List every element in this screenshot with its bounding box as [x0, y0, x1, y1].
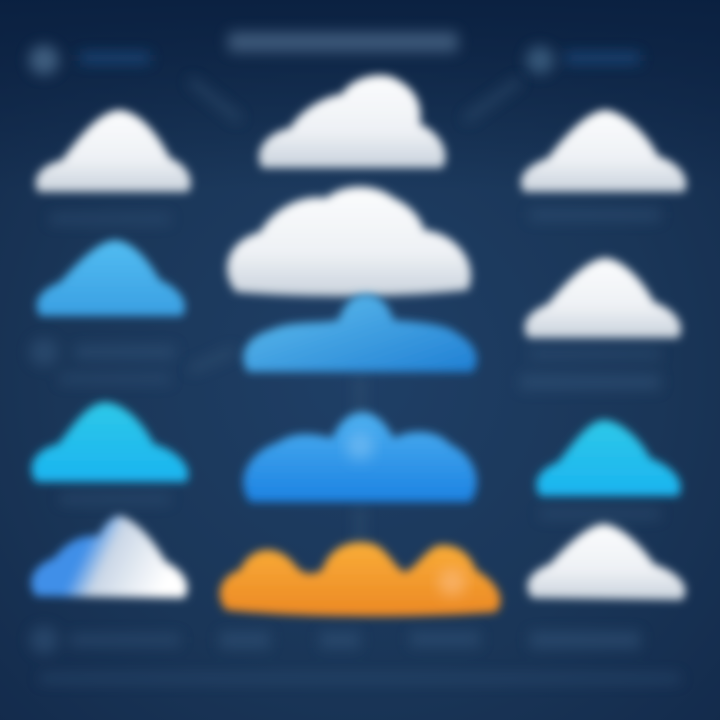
orange cloud highlight	[438, 568, 466, 596]
cloud: top right white	[521, 110, 686, 192]
title placeholder	[228, 32, 458, 52]
header icons	[29, 45, 640, 75]
cloud: centre blue third	[243, 412, 477, 502]
cloud: large centre white	[227, 187, 471, 296]
cloud: right cyan	[536, 420, 681, 496]
cloud: bottom left blue and white	[31, 516, 187, 598]
cloud: right white second	[525, 258, 681, 338]
label rows	[30, 210, 680, 682]
connector lines	[190, 80, 520, 545]
cloud: left cyan	[32, 402, 188, 482]
cloud: top centre white	[259, 75, 446, 168]
cloud: top left white	[36, 110, 191, 192]
cloud: centre blue second	[243, 294, 477, 372]
cloud: bottom right white	[527, 524, 685, 600]
cloud: left blue	[37, 240, 185, 316]
cloud: orange triple	[220, 542, 500, 616]
centre cloud highlight	[346, 432, 374, 460]
